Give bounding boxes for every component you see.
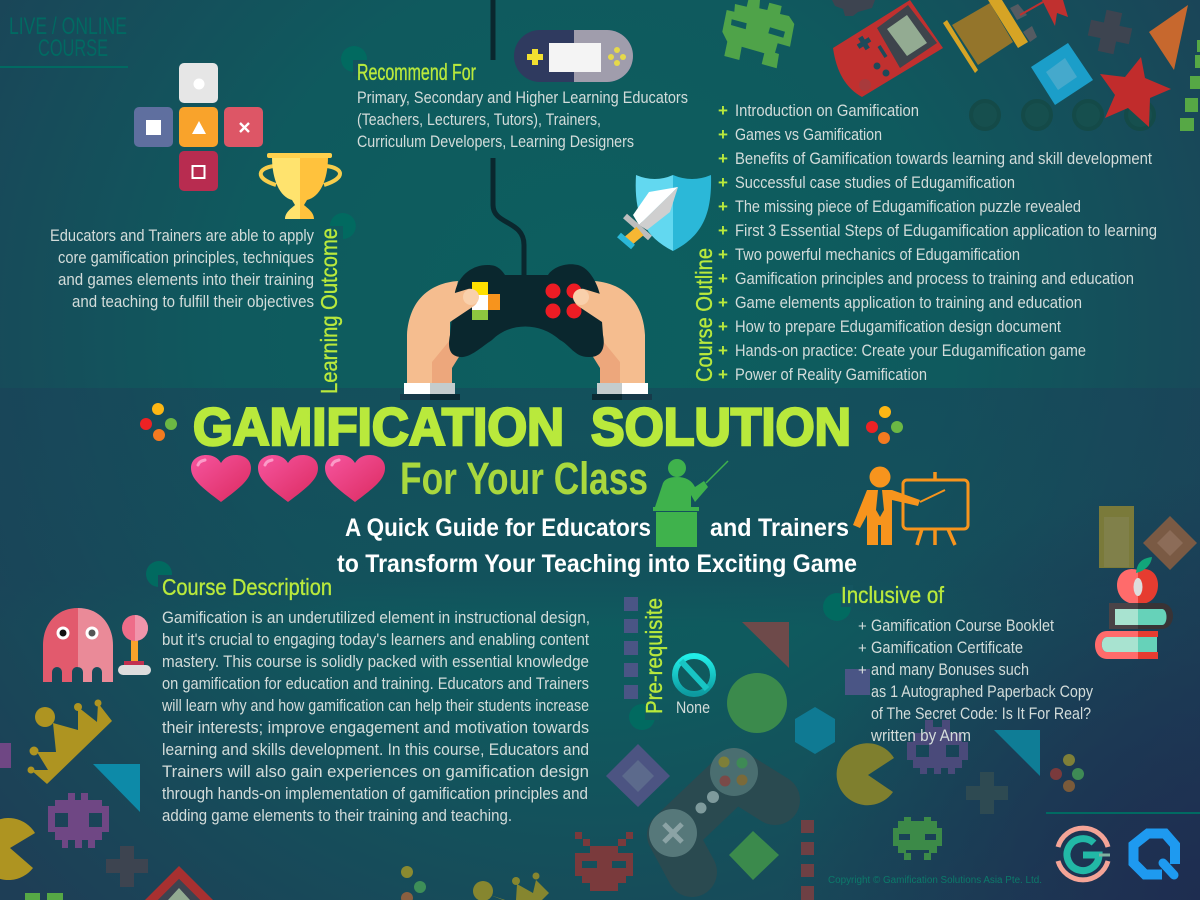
text: course description: learning and skills development. In this course, Educators and [162, 740, 589, 759]
heading: recommend for: Recommend For [357, 59, 476, 85]
icon: green invader [893, 817, 942, 860]
icon: apple on books [1095, 557, 1173, 659]
shape: olive pac-man [837, 743, 894, 805]
brown dashes [801, 820, 814, 900]
list: inclusive of: Gamification Certificate [871, 638, 1023, 657]
list: course outline: Game elements application to training and education [735, 293, 1082, 312]
icon: red star [1100, 57, 1171, 127]
list: course outline: + [718, 317, 728, 336]
list: inclusive of: of The Secret Code: Is It For Real? [871, 704, 1091, 723]
heading: inclusive of: Inclusive of [841, 582, 945, 608]
heading: pre-requisite: Pre-requisite [641, 598, 667, 714]
list: course outline: + [718, 365, 728, 384]
shape: teal triangle right [994, 730, 1040, 776]
list: course outline: + [718, 341, 728, 360]
icon: large gamepad [649, 748, 775, 872]
list: course outline: + [718, 197, 728, 216]
text: course description: but it's crucial to engaging today's learners and enabling content [162, 630, 589, 649]
list: inclusive of: + [858, 662, 867, 679]
purple dashes [624, 597, 638, 699]
text: learning outcome description: Educators and Trainers are able to apply [50, 226, 314, 245]
list: inclusive of: + [858, 618, 867, 635]
icon: faded dots right [1050, 754, 1084, 792]
icon: orange triangle [1149, 5, 1188, 70]
list: course outline: How to prepare Edugamification design document [735, 317, 1061, 336]
icon: blue diamond [1031, 43, 1093, 105]
text: learning outcome description: and teaching to fulfill their objectives [72, 292, 314, 311]
icon: crown [28, 700, 112, 784]
icon: three hearts [191, 455, 385, 502]
icon: top space invader [722, 0, 794, 68]
list: course outline: Gamification principles and process to training and education [735, 269, 1134, 288]
decorative faint circles top right [971, 101, 1154, 129]
list: course outline: + [718, 245, 728, 264]
heading: course description [146, 561, 332, 600]
icon: trophy [261, 153, 340, 219]
heading: pre-requisite [629, 598, 667, 730]
shape: brown triangle [742, 622, 789, 668]
icon: red handheld console [833, 0, 943, 97]
text: recommended audience: Curriculum Developers, Learning Designers [357, 132, 634, 151]
text: course description: Gamification is an underutilized element in instructional design, [162, 608, 590, 627]
green square dashes top right [1180, 40, 1200, 131]
heading: learning outcome: Learning Outcome [316, 228, 342, 394]
icon: dark cross right [1085, 7, 1135, 57]
title: SOLUTION [591, 398, 851, 457]
icon: small dark cross top [832, 0, 875, 16]
list: inclusive of: written by Anm [870, 726, 971, 745]
list: course outline: The missing piece of Edugamification puzzle revealed [735, 197, 1081, 216]
text: course description: Trainers will also gain experiences on gamification design [162, 762, 589, 781]
heading: course description: Course Description [162, 574, 332, 600]
green squares bottom left [25, 893, 63, 900]
logo: G [1058, 828, 1110, 880]
list: inclusive of: + [858, 640, 867, 657]
text: recommended audience: (Teachers, Lecturers, Tutors), Trainers, [357, 110, 601, 129]
subtitle: quick guide [337, 514, 857, 578]
list: inclusive of: Gamification Course Booklet [871, 616, 1054, 635]
text: course description: adding game elements to their training and teaching. [162, 806, 512, 825]
heading: learning outcome [316, 213, 356, 394]
course mode label: LIVE / ONLINE [9, 13, 127, 40]
text: course description: through hands-on implementation of gamification principles and [162, 784, 588, 803]
icon: pac-man left [0, 818, 35, 880]
list: course outline: + [718, 269, 728, 288]
list: course outline: + [718, 101, 728, 120]
heading: course outline: Course Outline [691, 248, 717, 382]
list: course outline: + [718, 293, 728, 312]
list: course outline: Benefits of Gamification towards learning and skill development [735, 149, 1152, 168]
text: course description: will learn why and how gamification can help their students increase [161, 696, 589, 715]
text: recommended audience: Primary, Secondary and Higher Learning Educators [357, 88, 688, 107]
icon: coloured dots left [140, 403, 177, 441]
text: copyright: Copyright © Gamification Solutions Asia Pte. Ltd. [828, 875, 1042, 886]
shape: teal hexagon [795, 707, 835, 754]
icon: shield and sword [619, 175, 711, 251]
list: course outline: + [718, 125, 728, 144]
text: course description [161, 608, 590, 825]
text: recommended audience [357, 88, 688, 151]
shape: teal triangle left [93, 764, 140, 812]
list: course outline [718, 101, 1157, 384]
list: course outline: + [718, 221, 728, 240]
list: course outline: Games vs Gamification [735, 125, 882, 144]
heading: inclusive of [823, 582, 945, 621]
list: course outline: Introduction on Gamification [735, 101, 919, 120]
icon: purple pixel skull [48, 793, 109, 848]
icon: top gamepad [514, 30, 633, 82]
course mode label: COURSE [38, 35, 108, 62]
icon: partial console bottom [145, 866, 213, 900]
faded block and diamond upper right [1099, 506, 1197, 570]
course mode label [0, 13, 128, 68]
list: course outline: Two powerful mechanics of Edugamification [735, 245, 1020, 264]
icon: pink ghost [43, 608, 113, 682]
divider line bottom right [1046, 812, 1200, 814]
list: inclusive of: as 1 Autographed Paperback Copy [871, 682, 1093, 701]
cable [493, 0, 524, 276]
subtitle: quick guide: to Transform Your Teaching into Exciting Game [337, 550, 857, 578]
list: course outline: + [718, 173, 728, 192]
icon: game cartridge spool and flag [943, 0, 1068, 73]
icon: faded dots bottom [401, 866, 426, 900]
list: course outline: Hands-on practice: Create your Edugamification game [735, 341, 1086, 360]
shape: purple block [0, 743, 11, 768]
icon: dark cross bottom left [106, 846, 148, 887]
logo: Q [1134, 834, 1175, 875]
text: learning outcome description: and games elements into their training [58, 270, 314, 289]
shape: purple diamond [606, 744, 670, 807]
heading: recommend for [341, 46, 476, 85]
text: course description: their interests; improve engagement and motivation towards [162, 718, 589, 737]
text: none: None [676, 698, 710, 717]
text: course description: mastery. This course is solidly packed with essential knowledge [162, 652, 589, 671]
icon: joystick [118, 615, 151, 675]
icon: presenter with board [853, 466, 968, 545]
icon: faded crown bottom [473, 872, 549, 900]
icon: coloured dots right [866, 406, 903, 444]
subtitle: quick guide: and Trainers [710, 514, 849, 542]
shape: purple square [845, 669, 870, 695]
list: course outline: Successful case studies of Edugamification [735, 173, 1015, 192]
shape: green diamond [729, 831, 779, 880]
icon: button pad [134, 63, 263, 191]
icon: teacher at podium [653, 459, 728, 547]
title [193, 398, 851, 457]
text: learning outcome description [50, 226, 314, 311]
icon: hands holding controller [400, 264, 652, 400]
icon: dark cross right bottom [966, 772, 1008, 814]
icon: faded purple skull [907, 720, 968, 774]
list: course outline: Power of Reality Gamification [735, 365, 927, 384]
icon: prohibited sign [675, 656, 713, 694]
title: GAMIFICATION [193, 398, 564, 457]
text: learning outcome description: core gamification principles, techniques [58, 248, 314, 267]
list: inclusive of: and many Bonuses such [871, 660, 1029, 679]
subtitle: quick guide: A Quick Guide for Educators [345, 514, 651, 542]
list: course outline: + [718, 149, 728, 168]
list: inclusive of [858, 616, 1093, 745]
text: course description: on gamification for education and training. Educators and Trainers [162, 674, 589, 693]
icon: red invader [575, 832, 633, 891]
subtitle: for your class: For Your Class [400, 453, 648, 504]
shape: green circle [727, 673, 787, 733]
